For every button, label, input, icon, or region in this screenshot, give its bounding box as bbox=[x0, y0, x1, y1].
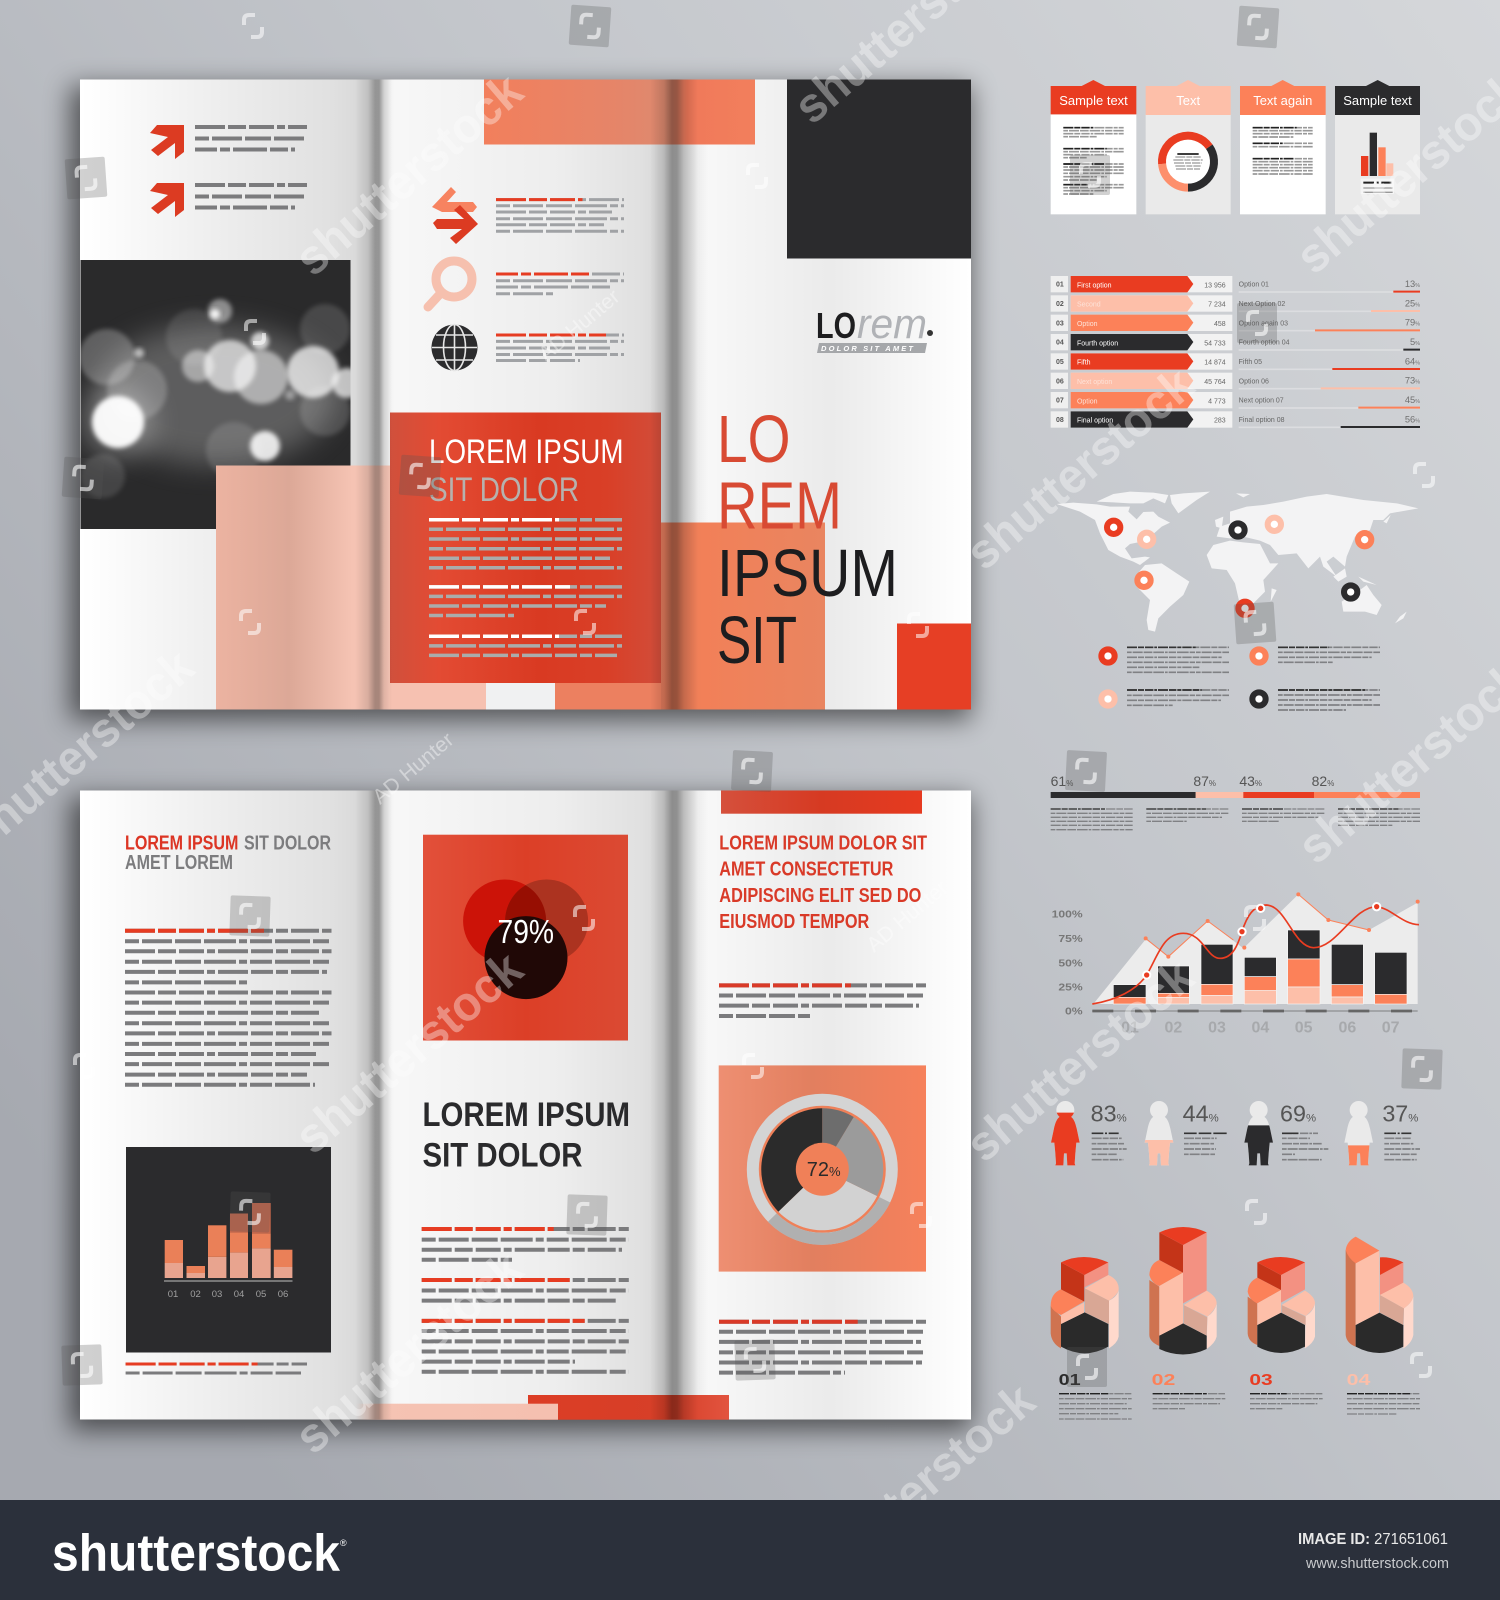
person: 83% bbox=[1051, 1101, 1127, 1165]
bar labels: 43% bbox=[1239, 773, 1262, 789]
row 03: 03 bbox=[1056, 320, 1064, 327]
icon: magnifier bbox=[428, 261, 472, 307]
watermark text: shutterstock bbox=[285, 941, 534, 1164]
legend item: salmon bbox=[1252, 647, 1380, 663]
list percentages: 64% bbox=[1405, 356, 1420, 366]
stacked bars bbox=[1113, 930, 1407, 1004]
heading: Lorem ipsum sit dolor: LOREM IPSUM bbox=[429, 433, 624, 471]
watermark text: shutterstock bbox=[797, 1373, 1046, 1596]
row 02: 7 234 bbox=[1208, 302, 1226, 309]
map legend bbox=[1101, 647, 1380, 710]
y axis labels: 0% bbox=[1065, 1007, 1083, 1018]
logo: rem bbox=[857, 300, 927, 347]
cover title: SIT bbox=[717, 603, 797, 678]
row 01: 13 956 bbox=[1204, 282, 1226, 289]
row 01 bbox=[1051, 276, 1232, 292]
bar labels: 61% bbox=[1051, 773, 1073, 789]
person: 44%: 44% bbox=[1183, 1101, 1219, 1127]
heading: Lorem ipsum sit dolor amet lorem: LOREM IPSUM bbox=[125, 832, 238, 854]
brochure spread: outside pages bbox=[70, 80, 971, 720]
legend item: red bbox=[1101, 647, 1229, 672]
cylinder 01 bbox=[1051, 1257, 1119, 1353]
heading: Lorem ipsum sit dolor: SIT DOLOR bbox=[422, 1136, 583, 1174]
isometric cylinders bbox=[1051, 1227, 1420, 1419]
row 08: 08 bbox=[1056, 417, 1064, 424]
map bbox=[1057, 492, 1418, 632]
list percentages: 56% bbox=[1405, 414, 1420, 424]
row 08: 283 bbox=[1214, 418, 1226, 425]
segmented percentage bar bbox=[1051, 773, 1420, 830]
watermark text: AD Hunter bbox=[368, 728, 458, 809]
logo: DOLOR SIT AMET bbox=[821, 344, 914, 353]
list labels: Next option 07 bbox=[1239, 398, 1284, 405]
legend item: pink bbox=[1101, 690, 1229, 706]
cylinder 03 bbox=[1248, 1257, 1315, 1353]
watermark text: shutterstock bbox=[285, 1241, 534, 1464]
heading: Lorem ipsum sit dolor amet lorem: SIT DOLOR bbox=[244, 832, 331, 854]
row 04: 04 bbox=[1056, 340, 1064, 347]
x axis labels: 02 bbox=[1164, 1020, 1182, 1037]
card 1: Sample text bbox=[1059, 93, 1128, 108]
text block bbox=[195, 127, 307, 208]
card 3 bbox=[1240, 80, 1326, 214]
y axis labels bbox=[1052, 910, 1083, 1018]
x axis labels: 01 bbox=[1121, 1020, 1139, 1037]
x axis labels: 06 bbox=[1338, 1020, 1356, 1037]
watermark text: AD Hunter bbox=[862, 876, 952, 957]
cylinder numbers: 01 bbox=[1059, 1372, 1081, 1389]
donut chart: 72% bbox=[753, 1100, 892, 1239]
person: 37% bbox=[1344, 1101, 1420, 1165]
world map with markers bbox=[1057, 492, 1418, 632]
icon: up-right arrow bbox=[150, 125, 184, 159]
card 4 bbox=[1335, 80, 1420, 214]
text block: body copy bbox=[125, 931, 332, 1085]
marker: red bbox=[1107, 521, 1120, 534]
footer logo: shutterstock bbox=[52, 1524, 340, 1582]
cylinder numbers bbox=[1059, 1372, 1370, 1389]
y axis labels: 25% bbox=[1058, 982, 1083, 993]
row 07: 07 bbox=[1056, 398, 1064, 405]
person: 44% bbox=[1145, 1101, 1227, 1165]
list labels: Final option 08 bbox=[1239, 417, 1285, 424]
heading: Lorem ipsum sit dolor bbox=[429, 433, 624, 509]
combo chart bbox=[1052, 892, 1420, 1037]
bar labels: 87% bbox=[1193, 773, 1216, 789]
text block: right column top bbox=[719, 985, 926, 1016]
list labels bbox=[1239, 282, 1290, 424]
list percentages: 5% bbox=[1410, 337, 1420, 347]
cylinder 04 bbox=[1346, 1237, 1413, 1353]
text block: middle column copy bbox=[422, 1229, 629, 1372]
watermark text: shutterstock bbox=[285, 63, 534, 286]
footer bar bbox=[0, 1500, 1500, 1600]
icon: up-right arrow bbox=[150, 183, 184, 217]
list percentages: 45% bbox=[1405, 395, 1420, 405]
marker: black bbox=[1344, 585, 1357, 599]
list percentages bbox=[1405, 279, 1420, 424]
row 07 bbox=[1051, 392, 1232, 408]
row 01: 01 bbox=[1056, 282, 1064, 289]
list labels: Option 01 bbox=[1239, 282, 1269, 289]
person: 37%: 37% bbox=[1382, 1101, 1418, 1127]
row 05: 05 bbox=[1056, 359, 1064, 366]
heading: red four-line title: EIUSMOD TEMPOR bbox=[719, 911, 870, 933]
bar chart on dark panel: 03 bbox=[212, 1289, 222, 1300]
panel: options table bbox=[1051, 276, 1232, 428]
bar chart on dark panel: 02 bbox=[190, 1289, 201, 1300]
row 06: 06 bbox=[1056, 378, 1064, 385]
person: 83%: 83% bbox=[1091, 1101, 1127, 1127]
panel: progress list bbox=[1239, 279, 1420, 427]
x axis labels bbox=[1121, 1020, 1400, 1037]
image id: IMAGE ID: 271651061 bbox=[1298, 1531, 1448, 1548]
x axis labels: 07 bbox=[1382, 1020, 1400, 1037]
cylinder 02 bbox=[1149, 1227, 1217, 1354]
marker: black bbox=[1231, 523, 1245, 537]
watermark text: shutterstock bbox=[956, 949, 1205, 1172]
list labels: Option 06 bbox=[1239, 378, 1269, 385]
heading: red four-line title: LOREM IPSUM DOLOR SIT bbox=[719, 832, 927, 854]
list percentages: 25% bbox=[1405, 298, 1420, 308]
red curve bbox=[1092, 903, 1419, 1004]
bar chart on dark panel: 05 bbox=[256, 1289, 266, 1300]
row 05: Fifth bbox=[1077, 360, 1091, 367]
person: 69%: 69% bbox=[1280, 1101, 1316, 1127]
bar chart on dark panel: 06 bbox=[278, 1289, 288, 1300]
watermark stamps bbox=[61, 5, 1443, 1387]
marker: salmon bbox=[1358, 533, 1371, 546]
row 04 bbox=[1051, 334, 1232, 350]
list percentages: 13% bbox=[1405, 279, 1420, 289]
heading: red four-line title: AMET CONSECTETUR bbox=[719, 858, 894, 880]
list labels: Fourth option 04 bbox=[1239, 340, 1290, 347]
row 04: Fourth option bbox=[1077, 340, 1118, 347]
marker: pink bbox=[1140, 533, 1153, 546]
text block with red heading bbox=[496, 200, 624, 360]
row 03: Option bbox=[1077, 321, 1098, 328]
card 3: Text again bbox=[1253, 93, 1312, 108]
bar captions bbox=[1051, 809, 1420, 830]
heading: red four-line title bbox=[719, 832, 927, 933]
y axis labels: 50% bbox=[1058, 958, 1083, 969]
bar chart on dark panel bbox=[164, 1203, 292, 1300]
card 4: Sample text bbox=[1343, 93, 1412, 108]
cylinder numbers: 02 bbox=[1152, 1372, 1175, 1389]
card 2: Text bbox=[1176, 93, 1200, 108]
card 2 bbox=[1146, 80, 1231, 214]
website: www.shutterstock.com bbox=[1305, 1555, 1449, 1572]
x axis labels: 03 bbox=[1208, 1020, 1226, 1037]
marker: pink bbox=[1268, 518, 1281, 531]
row 03 bbox=[1051, 315, 1232, 331]
photo: bokeh lights bbox=[79, 299, 362, 498]
donut chart: 72%: 72% bbox=[807, 1159, 841, 1181]
y axis labels: 75% bbox=[1058, 934, 1083, 945]
text block: right column bottom bbox=[719, 1322, 926, 1373]
row 04: 54 733 bbox=[1204, 340, 1226, 347]
list labels: Next Option 02 bbox=[1239, 301, 1285, 308]
venn diagram: 79% bbox=[463, 880, 588, 999]
bar chart on dark panel: 01 bbox=[168, 1289, 178, 1300]
bar labels bbox=[1051, 773, 1334, 789]
row 08: Final option bbox=[1077, 418, 1113, 425]
panel: header cards bbox=[1051, 80, 1420, 214]
cylinder numbers: 03 bbox=[1249, 1372, 1273, 1389]
row 02 bbox=[1051, 295, 1232, 312]
heading: Lorem ipsum sit dolor: LOREM IPSUM bbox=[422, 1096, 630, 1134]
legend item: black bbox=[1252, 690, 1380, 710]
list labels: Option again 03 bbox=[1239, 320, 1288, 327]
list labels: Fifth 05 bbox=[1239, 359, 1262, 366]
heading: red four-line title: ADIPISCING ELIT SED DO bbox=[719, 885, 921, 907]
row 03: 458 bbox=[1214, 321, 1226, 328]
row 02: 02 bbox=[1056, 301, 1064, 308]
thin line series bbox=[1144, 892, 1420, 959]
bar chart on dark panel: 04 bbox=[234, 1289, 244, 1300]
cylinder numbers: 04 bbox=[1347, 1372, 1370, 1389]
axis bbox=[1092, 1008, 1418, 1014]
people statistics bbox=[1051, 1101, 1420, 1165]
logo: LO bbox=[816, 305, 856, 346]
person: 69% bbox=[1244, 1101, 1328, 1165]
watermark text: shutterstock bbox=[956, 357, 1205, 580]
icon: globe bbox=[432, 324, 478, 370]
row 08 bbox=[1051, 411, 1232, 428]
brochure spread: inside pages bbox=[70, 790, 971, 1430]
row 02: Second bbox=[1077, 302, 1101, 309]
cover title: REM bbox=[717, 468, 842, 544]
area bbox=[1093, 894, 1418, 1004]
list percentages: 73% bbox=[1405, 376, 1420, 386]
y axis labels: 100% bbox=[1052, 910, 1083, 921]
row 06 bbox=[1051, 373, 1232, 389]
x axis labels: 04 bbox=[1251, 1020, 1269, 1037]
x axis labels: 05 bbox=[1295, 1020, 1313, 1037]
row 06: Next option bbox=[1077, 379, 1112, 386]
row 05 bbox=[1051, 353, 1232, 370]
cylinder captions bbox=[1059, 1394, 1420, 1419]
list percentages: 79% bbox=[1405, 318, 1420, 328]
row 07: 4 773 bbox=[1208, 398, 1226, 405]
venn diagram: 79%: 79% bbox=[498, 913, 554, 950]
row 01: First option bbox=[1077, 282, 1112, 289]
cover title bbox=[717, 402, 898, 678]
watermark text: AD Hunter bbox=[534, 285, 624, 366]
logo bbox=[816, 300, 933, 353]
row 07: Option bbox=[1077, 398, 1098, 405]
card 1 bbox=[1051, 80, 1136, 214]
heading: Lorem ipsum sit dolor amet lorem: AMET LOREM bbox=[125, 852, 233, 874]
marker: red bbox=[1238, 602, 1252, 615]
list bars bbox=[1315, 292, 1420, 427]
heading: Lorem ipsum sit dolor: SIT DOLOR bbox=[429, 471, 579, 509]
marker: salmon bbox=[1137, 574, 1151, 587]
cover title: LO bbox=[717, 402, 790, 477]
icon: exchange arrows bbox=[432, 187, 478, 244]
text block on red panel bbox=[429, 520, 622, 655]
text block: chart caption bbox=[126, 1364, 307, 1373]
bar bbox=[1051, 792, 1420, 798]
footer registered mark: ® bbox=[340, 1538, 347, 1548]
row 06: 45 764 bbox=[1204, 379, 1226, 386]
cover title: IPSUM bbox=[717, 536, 898, 611]
heading: Lorem ipsum sit dolor bbox=[422, 1096, 630, 1174]
heading: Lorem ipsum sit dolor amet lorem bbox=[125, 832, 331, 874]
bar labels: 82% bbox=[1312, 773, 1334, 789]
row 05: 14 874 bbox=[1204, 360, 1226, 367]
